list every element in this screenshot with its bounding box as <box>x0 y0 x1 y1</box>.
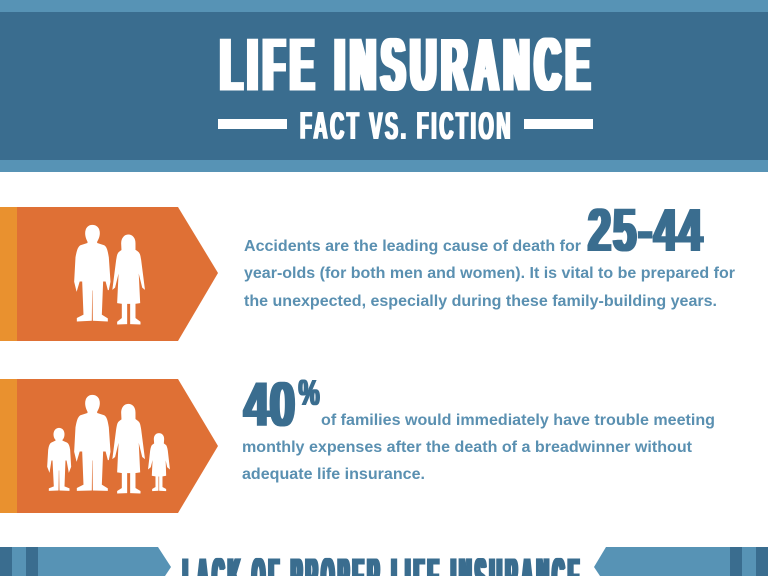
right ribbon <box>594 547 768 576</box>
text block: accidents fact: the unexpected, especially during these family-building years. <box>244 293 717 310</box>
icon: couple <box>75 225 144 324</box>
text block: families fact: of families would immediately have trouble meeting <box>321 412 715 429</box>
text block: accidents fact: year-olds (for both men and women). It is vital to be prepared for <box>244 265 735 282</box>
big number: 40% <box>244 369 320 440</box>
header banner <box>0 0 768 172</box>
subtitle with side rules <box>218 104 593 148</box>
text block: accidents fact <box>244 197 735 310</box>
text block: families fact: adequate life insurance. <box>242 466 425 483</box>
left ribbon <box>0 547 171 576</box>
panel: families arrow <box>0 379 218 513</box>
big number: 25-44: 25-44 <box>588 197 702 265</box>
panel: accidents arrow <box>0 207 218 341</box>
text block: families fact: monthly expenses after the death of a breadwinner without <box>242 439 693 456</box>
big number: 40%: % <box>298 373 320 413</box>
section heading banner <box>0 547 768 576</box>
big number: 40%: 40 <box>244 369 295 440</box>
title: LIFE INSURANCE <box>220 24 589 107</box>
text block: accidents fact: Accidents are the leading cause of death for <box>244 238 581 255</box>
text block: families fact <box>242 369 715 483</box>
subtitle with side rules: FACT VS. FICTION <box>300 104 511 148</box>
icon: family of four <box>48 395 169 493</box>
